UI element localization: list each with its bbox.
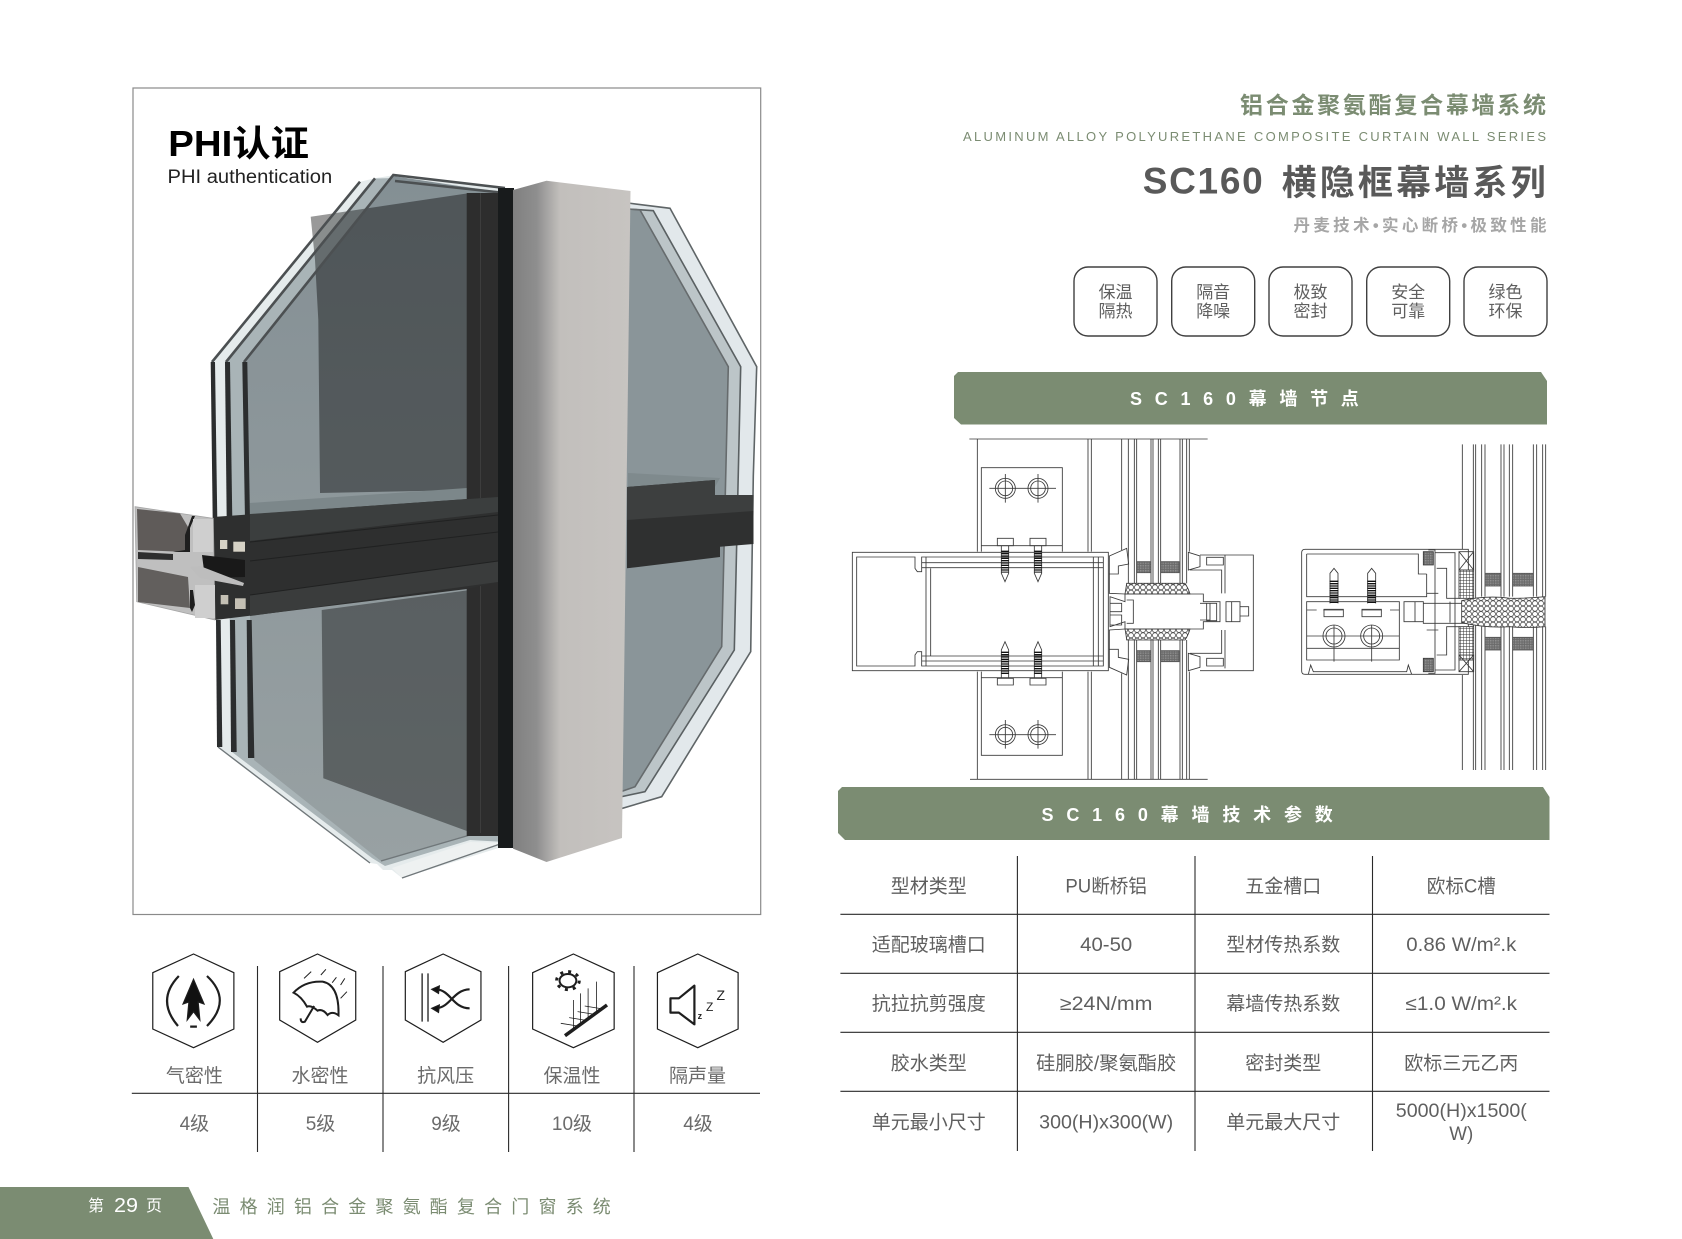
feature tags: 环保 xyxy=(1488,302,1522,321)
performance labels: 4级 xyxy=(180,1113,209,1135)
table text: 适配玻璃槽口 xyxy=(872,934,986,956)
icon: sound insulation xyxy=(657,954,738,1048)
table text: 型材类型 xyxy=(891,876,967,898)
icon: hexagons and pictograms xyxy=(153,954,738,1048)
speaker z letters xyxy=(698,987,726,1021)
page number: 第 xyxy=(88,1197,104,1215)
page number xyxy=(88,1195,162,1217)
left glass front pane xyxy=(243,176,505,861)
glass diagonals xyxy=(212,175,505,362)
table text: 欧标三元乙丙 xyxy=(1404,1052,1518,1074)
table text: 欧标C槽 xyxy=(1427,876,1496,898)
sill upper xyxy=(250,488,467,514)
glass bottom edges xyxy=(218,747,503,878)
banner: nodes: SC160幕墙节点 xyxy=(1130,389,1359,409)
right lower sill xyxy=(628,545,718,568)
performance labels: 气密性 xyxy=(166,1065,223,1087)
table text: 五金槽口 xyxy=(1245,876,1321,898)
main title: 横隐框幕墙系列 xyxy=(1282,164,1546,203)
table text: W) xyxy=(1449,1124,1473,1145)
performance labels: 10级 xyxy=(552,1113,592,1135)
tinted back panel upper xyxy=(311,193,470,493)
panel: product render xyxy=(133,88,761,914)
performance labels: 水密性 xyxy=(291,1065,349,1087)
table text: 40-50 xyxy=(1080,935,1132,956)
table text: 型材传热系数 xyxy=(1226,934,1340,956)
feature tags: 隔音 xyxy=(1196,283,1230,302)
icon: water tightness xyxy=(280,954,356,1042)
steel tube xyxy=(852,552,1108,671)
feature tags: 保温 xyxy=(1098,283,1132,302)
right glass outer pane xyxy=(620,203,757,809)
performance labels: 抗风压 xyxy=(417,1065,474,1087)
left vertical glass edges xyxy=(211,362,254,758)
performance labels: 5级 xyxy=(306,1113,335,1135)
polyurethane foam xyxy=(1125,583,1190,640)
curtain wall render xyxy=(135,175,757,878)
performance labels xyxy=(166,1065,726,1135)
CAD node drawing: transom section xyxy=(1302,444,1546,770)
icon: air tightness xyxy=(153,954,234,1048)
spacer blocks xyxy=(1485,573,1533,650)
series title: 铝合金聚氨酯复合幕墙系统 xyxy=(1240,92,1546,118)
table text: 抗拉抗剪强度 xyxy=(872,993,986,1015)
aluminium profile xyxy=(135,507,246,620)
header text block xyxy=(963,92,1547,235)
feature tags: 密封 xyxy=(1294,302,1328,321)
feature tags: 降噪 xyxy=(1196,302,1230,321)
right glass middle pane xyxy=(620,209,741,797)
feature tags: 绿色 xyxy=(1488,283,1522,302)
banner: parameters xyxy=(838,787,1550,840)
PHI heading xyxy=(168,123,332,188)
PHI heading: PHI认证 xyxy=(168,123,309,164)
icon: thermal insulation xyxy=(533,954,614,1048)
table text: 单元最小尺寸 xyxy=(872,1112,986,1134)
table text: ≤1.0 W/m².k xyxy=(1406,994,1518,1015)
thermal break xyxy=(1404,550,1465,673)
page number: 页 xyxy=(146,1198,162,1215)
left glass white strip bottom xyxy=(392,842,503,878)
bolts xyxy=(1307,610,1399,662)
foam plug xyxy=(1462,597,1545,627)
footer xyxy=(0,1187,611,1239)
glass spacer blocks xyxy=(1137,562,1179,662)
footer title: 温格润铝合金聚氨酯复合门窗系统 xyxy=(212,1197,611,1217)
table text: 0.86 W/m².k xyxy=(1406,935,1517,956)
speaker z letters: Z xyxy=(706,1000,713,1014)
right sill xyxy=(628,473,720,487)
dark mullion strip xyxy=(498,188,514,848)
thermal core and pressure plates xyxy=(1110,594,1220,629)
main title xyxy=(1143,160,1546,203)
feature tags: 隔热 xyxy=(1098,302,1132,321)
right transom xyxy=(627,480,754,568)
bolts xyxy=(989,474,1056,749)
grid lines xyxy=(132,966,760,1152)
table text: 幕墙传热系数 xyxy=(1226,993,1340,1015)
table text: PU断桥铝 xyxy=(1065,876,1147,898)
main title: SC160 xyxy=(1143,160,1263,202)
performance labels: 隔声量 xyxy=(669,1065,726,1087)
performance icons row xyxy=(132,954,760,1152)
feature tags: 安全 xyxy=(1391,283,1425,302)
screws xyxy=(1324,568,1381,617)
performance labels: 4级 xyxy=(683,1113,713,1135)
feature tags: 极致 xyxy=(1294,283,1328,302)
right glass front pane xyxy=(620,209,728,792)
table text: 硅胴胶/聚氨酯胶 xyxy=(1036,1052,1176,1074)
nut xyxy=(1226,602,1249,622)
table grid xyxy=(840,856,1550,1151)
table text: 5000(H)x1500( xyxy=(1396,1101,1527,1122)
PHI heading: PHI authentication xyxy=(168,167,332,188)
tagline: 丹麦技术•实心断桥•极致性能 xyxy=(1294,215,1547,235)
left glass outer pane xyxy=(211,175,505,878)
icon: wind pressure xyxy=(405,954,481,1042)
performance labels: 9级 xyxy=(431,1113,461,1135)
left transom xyxy=(213,497,498,620)
performance labels: 保温性 xyxy=(543,1065,601,1087)
footer tab xyxy=(0,1187,213,1239)
feature tags xyxy=(1074,267,1547,336)
table text: ≥24N/mm xyxy=(1060,994,1152,1015)
mullion xyxy=(467,193,499,836)
gasket blocks xyxy=(1459,570,1474,660)
table text: 密封类型 xyxy=(1245,1052,1321,1074)
english subtitle: ALUMINUM ALLOY POLYURETHANE COMPOSITE CURTAIN WALL SERIES xyxy=(963,129,1546,144)
CAD node drawing: mullion section xyxy=(852,439,1253,779)
plates xyxy=(981,468,1062,755)
table text: 300(H)x300(W) xyxy=(1039,1112,1173,1134)
table text: 单元最大尺寸 xyxy=(1226,1112,1340,1134)
table text: 胶水类型 xyxy=(891,1052,967,1074)
parameters table xyxy=(840,856,1550,1151)
speaker z letters: Z xyxy=(716,987,726,1003)
transom box xyxy=(1302,549,1468,674)
screws xyxy=(997,538,1046,685)
feature tags: 可靠 xyxy=(1391,302,1425,321)
table text xyxy=(872,876,1527,1145)
speaker z letters: z xyxy=(698,1011,703,1021)
banner: nodes xyxy=(954,372,1547,424)
tinted back panel lower xyxy=(322,590,473,833)
page number: 29 xyxy=(114,1195,138,1217)
left glass middle pane xyxy=(225,178,505,866)
aluminium column xyxy=(513,181,630,862)
banner: parameters: SC160幕墙技术参数 xyxy=(1042,804,1333,825)
